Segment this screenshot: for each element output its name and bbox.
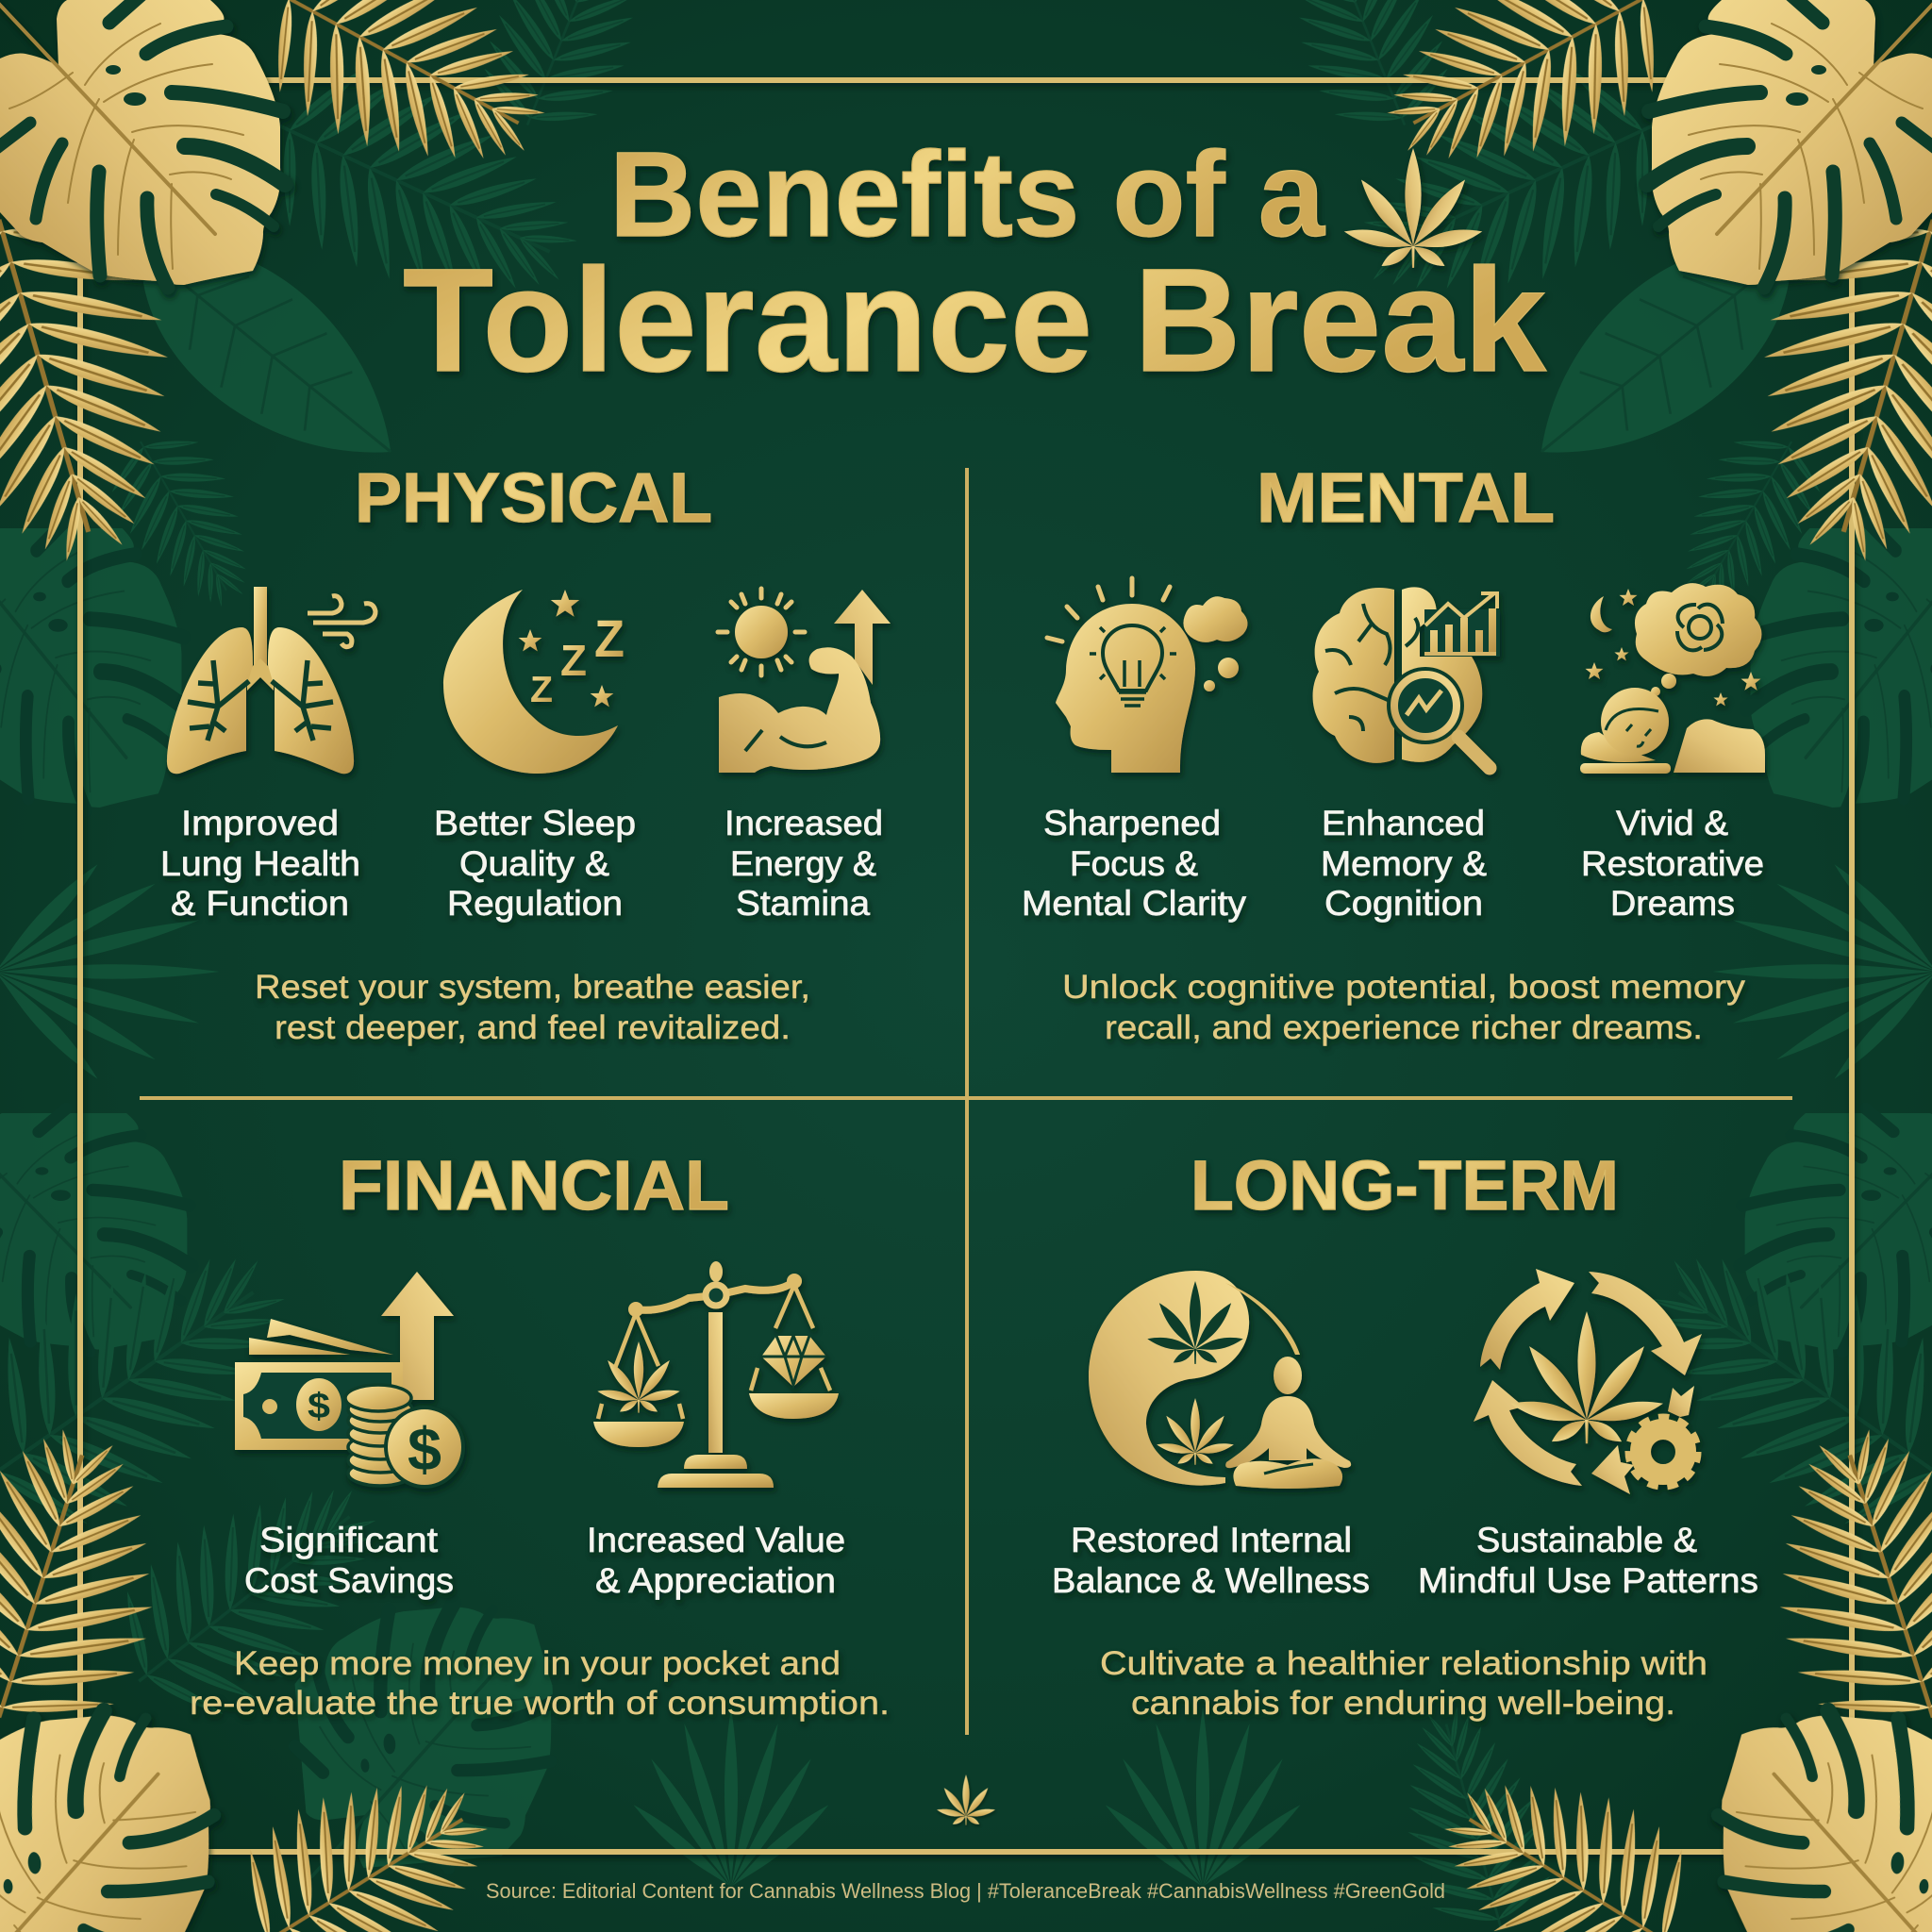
- label: lung health: Improved: [181, 804, 339, 842]
- tagline: long-term: cannabis for enduring well-being.: [1131, 1685, 1675, 1722]
- title: Tolerance Break: [403, 239, 1546, 403]
- label: memory: Enhanced: [1322, 804, 1485, 842]
- icon: sleeper and dream cloud: [1580, 583, 1765, 774]
- icon: brain with chart and magnifier: [1313, 587, 1500, 768]
- label: better sleep: Better Sleep: [434, 804, 636, 842]
- label: better sleep: Quality &: [459, 844, 609, 883]
- label: lung health: [160, 804, 360, 923]
- icon: title cannabis leaf: [1342, 148, 1484, 271]
- heading: mental: MENTAL: [1257, 458, 1555, 537]
- label: energy: [724, 804, 883, 923]
- label: energy: Energy &: [730, 844, 876, 883]
- tagline: financial: [190, 1645, 890, 1722]
- icon: moon and stars: Z: [560, 636, 587, 685]
- icon: moon and stars: [443, 590, 625, 774]
- label: dreams: [1581, 804, 1764, 923]
- label: dreams: Restorative: [1581, 844, 1764, 883]
- label: better sleep: [434, 804, 636, 923]
- label: mindful use: Mindful Use Patterns: [1418, 1561, 1758, 1600]
- icon: head with light bulb: [1047, 578, 1248, 773]
- icon: cycle arrows, leaf and gear: [1474, 1269, 1702, 1494]
- icon: footer cannabis leaf: [936, 1774, 996, 1826]
- label: memory: Cognition: [1324, 884, 1483, 923]
- title: [403, 127, 1546, 403]
- label: cost savings: Cost Savings: [244, 1561, 454, 1600]
- panel: long-term: [1052, 1146, 1758, 1722]
- tagline: financial: re-evaluate the true worth of consumption.: [190, 1685, 890, 1722]
- heading: long-term: LONG-TERM: [1191, 1146, 1619, 1224]
- source line: Source: Editorial Content for Cannabis Wellness Blog | #ToleranceBreak #CannabisWellness #GreenGold: [486, 1879, 1445, 1903]
- label: cost savings: Significant: [259, 1521, 439, 1559]
- label: focus: Mental Clarity: [1022, 884, 1247, 923]
- label: balance: [1052, 1521, 1370, 1600]
- panel: mental: [1022, 458, 1765, 1046]
- title: Benefits of a: [609, 127, 1325, 262]
- label: value: & Appreciation: [595, 1561, 836, 1600]
- icon: moon and stars: Z: [594, 608, 625, 668]
- tagline: financial: Keep more money in your pocket and: [234, 1645, 841, 1682]
- heading: financial: FINANCIAL: [339, 1146, 729, 1224]
- background foliage: right: [1256, 0, 1932, 1568]
- label: lung health: Lung Health: [160, 844, 360, 883]
- tagline: physical: rest deeper, and feel revitalized.: [275, 1009, 791, 1046]
- label: value: [587, 1521, 845, 1600]
- icon: moon and stars: Z: [530, 670, 553, 710]
- icon: cash, coins and arrow: $: [308, 1387, 330, 1426]
- label: cost savings: [244, 1521, 454, 1600]
- gold palm fronds: right: [1349, 0, 1932, 1932]
- label: focus: Sharpened: [1043, 804, 1221, 842]
- label: lung health: & Function: [171, 884, 349, 923]
- label: memory: [1321, 804, 1487, 923]
- tagline: long-term: [1100, 1645, 1707, 1722]
- tagline: mental: Unlock cognitive potential, boost memory: [1062, 969, 1746, 1006]
- label: energy: Stamina: [736, 884, 870, 923]
- label: energy: Increased: [724, 804, 883, 842]
- label: dreams: Dreams: [1610, 884, 1735, 923]
- panel: physical: [160, 458, 891, 1046]
- label: balance: Balance & Wellness: [1052, 1561, 1370, 1600]
- icon: lungs: [167, 587, 375, 774]
- label: balance: Restored Internal: [1071, 1521, 1352, 1559]
- gold palm fronds: left: [0, 0, 583, 1932]
- tagline: physical: Reset your system, breathe easier,: [255, 969, 810, 1006]
- icon: yin-yang and meditator: [1089, 1271, 1351, 1489]
- label: better sleep: Regulation: [447, 884, 623, 923]
- quadrant dividers: [140, 468, 1792, 1735]
- tagline: mental: [1062, 969, 1746, 1046]
- label: value: Increased Value: [587, 1521, 845, 1559]
- panel: financial: [190, 1146, 890, 1722]
- label: mindful use: [1418, 1521, 1758, 1600]
- tagline: mental: recall, and experience richer dreams.: [1105, 1009, 1703, 1046]
- label: focus: [1022, 804, 1247, 923]
- label: dreams: Vivid &: [1616, 804, 1728, 842]
- icon: balance scale: [593, 1261, 839, 1488]
- tagline: long-term: Cultivate a healthier relationship with: [1100, 1645, 1707, 1682]
- icon: sun, muscle and arrow: [718, 589, 891, 773]
- icon: cash, coins and arrow: $: [408, 1415, 441, 1483]
- label: focus: Focus &: [1070, 844, 1198, 883]
- label: mindful use: Sustainable &: [1476, 1521, 1697, 1559]
- label: memory: Memory &: [1321, 844, 1487, 883]
- heading: physical: PHYSICAL: [355, 458, 712, 537]
- icon: cash, coins and arrow: [235, 1272, 463, 1487]
- tagline: physical: [255, 969, 810, 1046]
